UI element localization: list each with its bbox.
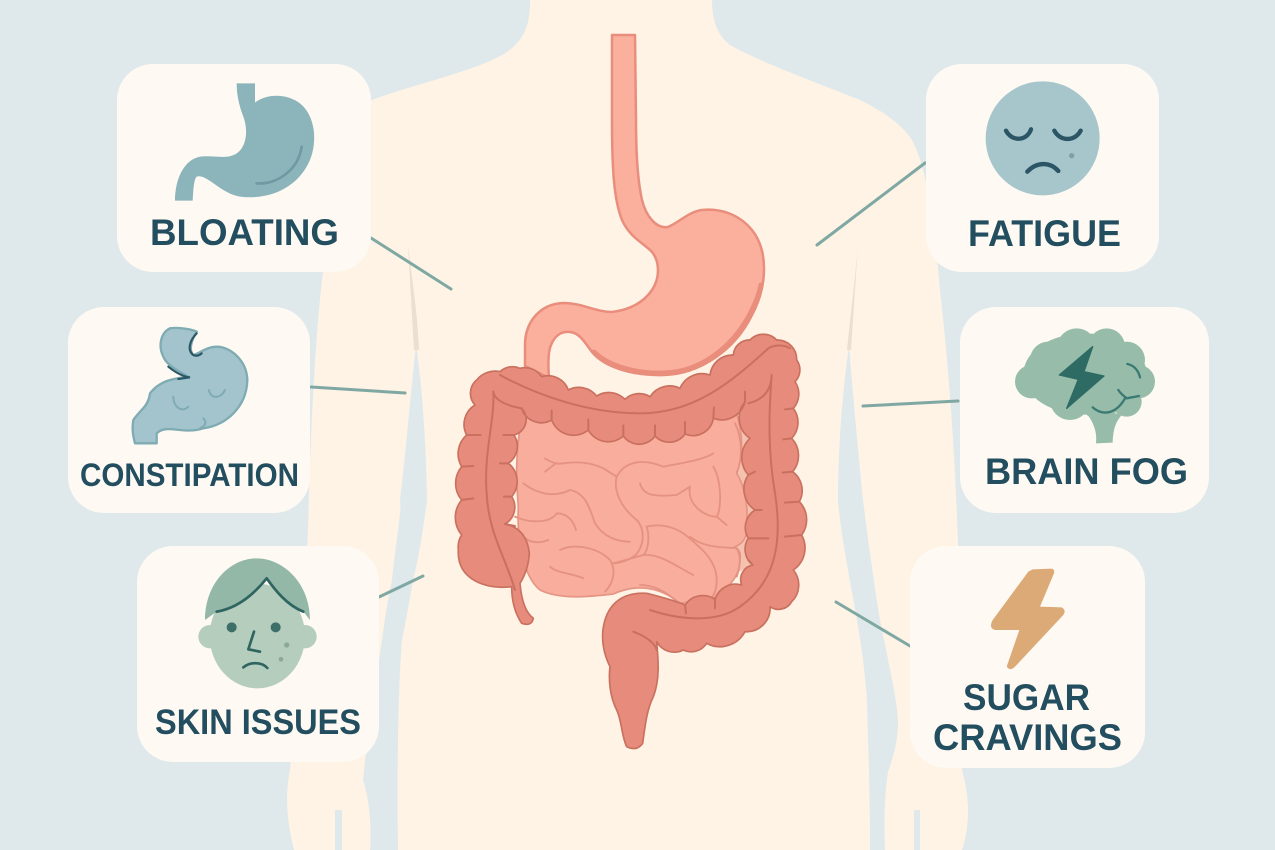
- body silhouette: [287, 0, 968, 850]
- intestines: [455, 334, 807, 749]
- stomach lower wall: [594, 285, 761, 373]
- intestine folds: [515, 423, 741, 602]
- label: BRAIN FOG: [985, 451, 1188, 492]
- backing behind small intestine: [707, 403, 755, 587]
- card: bloating: [117, 64, 371, 272]
- small intestine: [515, 407, 747, 603]
- icon: brain with bolt: [1015, 328, 1155, 443]
- icon: knotted stomach: [133, 328, 247, 443]
- right crease: [847, 245, 858, 350]
- card: skin issues: [137, 546, 379, 762]
- card: fatigue: [926, 64, 1159, 272]
- connector lines: [311, 163, 958, 646]
- icon: face with blemishes: [198, 558, 317, 688]
- label: BLOATING: [150, 212, 339, 253]
- card: constipation: [68, 307, 310, 513]
- stomach and esophagus: [525, 35, 764, 378]
- icon: tired face: [986, 81, 1100, 195]
- left crease: [408, 245, 419, 350]
- gap between right arm and torso: [838, 345, 898, 850]
- card: sugar cravings: [910, 546, 1145, 768]
- large intestine: [455, 334, 807, 749]
- gap between left arm and torso: [363, 345, 427, 850]
- colon inner lines: [462, 345, 802, 650]
- right finger gap: [914, 810, 920, 850]
- card: brain fog: [960, 307, 1209, 513]
- icon: lightning bolt: [991, 569, 1065, 669]
- label second line: CRAVINGS: [933, 717, 1122, 758]
- label: SUGAR: [963, 677, 1090, 718]
- left finger gap: [335, 810, 342, 850]
- label: FATIGUE: [968, 213, 1121, 254]
- label: SKIN ISSUES: [155, 703, 361, 742]
- icon: stomach: [175, 83, 314, 201]
- label: CONSTIPATION: [80, 457, 299, 493]
